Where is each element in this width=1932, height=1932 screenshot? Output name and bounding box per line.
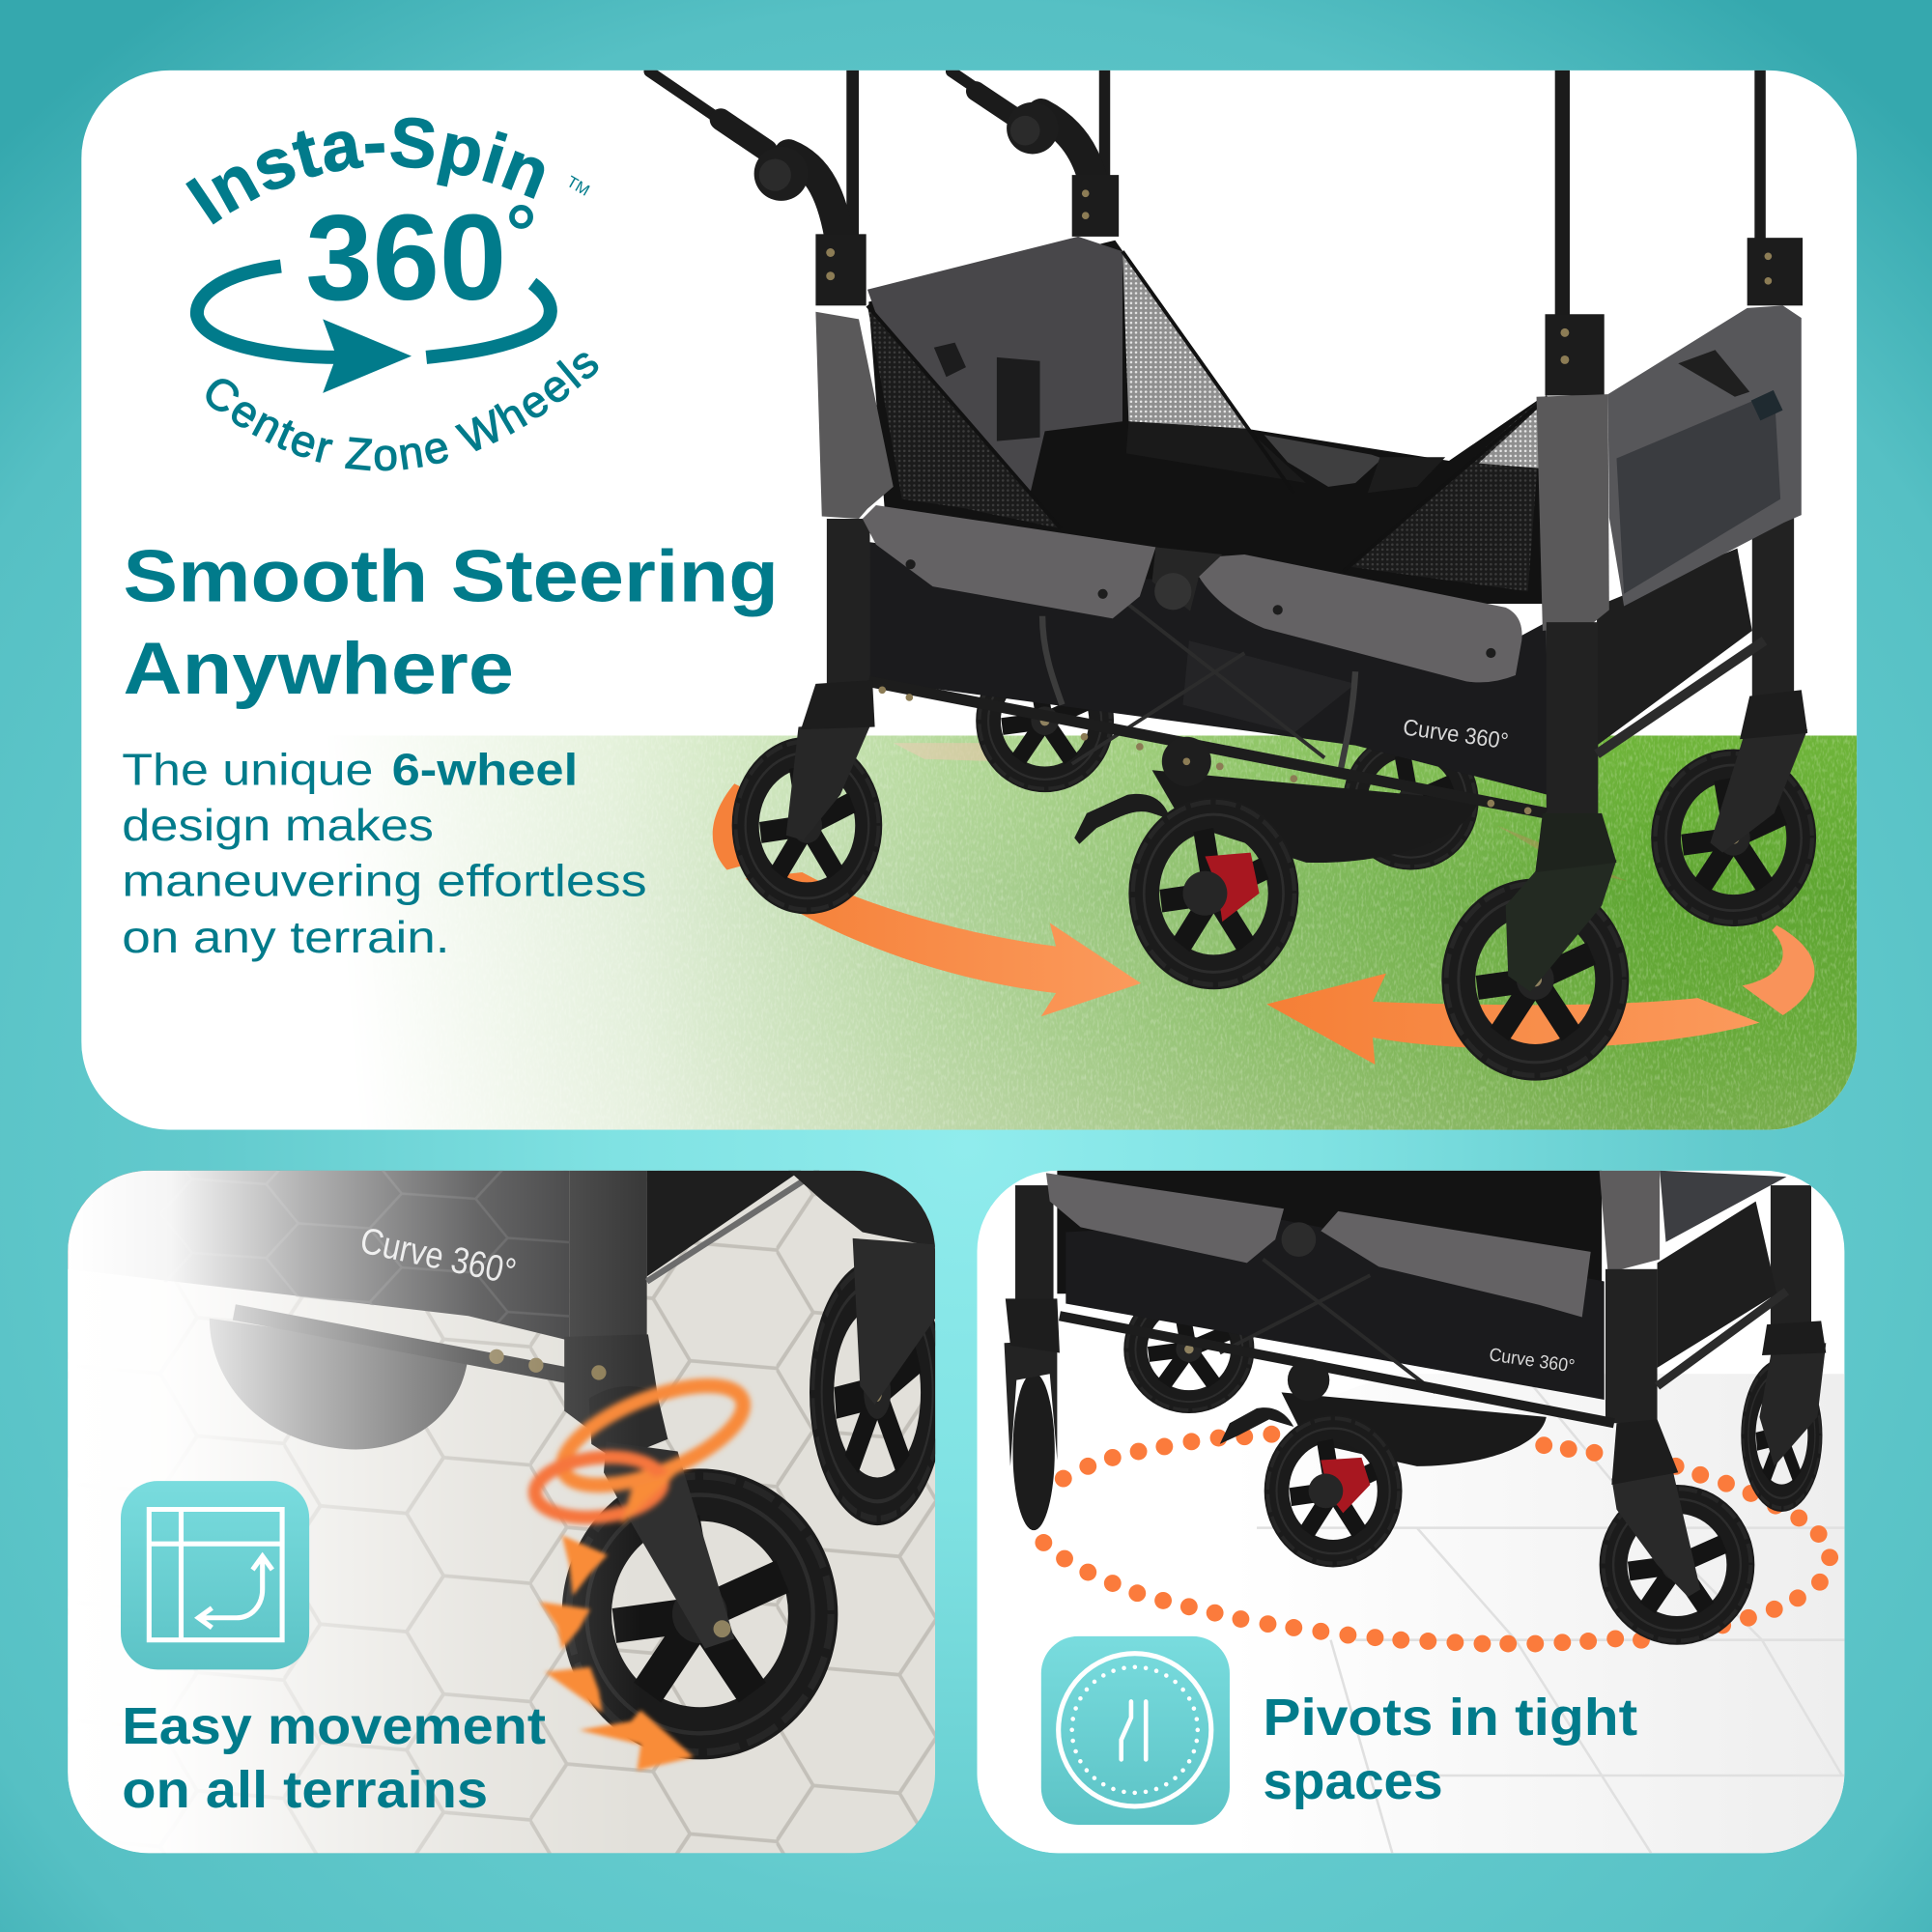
trademark: TM — [563, 172, 593, 200]
panel background — [81, 71, 1857, 1130]
canopy rods — [846, 71, 1766, 317]
side bar — [1658, 1292, 1786, 1386]
body text: The unique — [122, 744, 373, 794]
caption: easy movement: Easy movement — [122, 1698, 546, 1755]
panel background — [977, 1171, 1844, 1853]
rotation arrow: right arc — [426, 283, 551, 357]
swivel: back right — [1740, 690, 1807, 739]
rod sockets — [815, 175, 1803, 395]
road lines — [1122, 1701, 1146, 1759]
front right wheel — [1600, 1485, 1754, 1645]
rear right post — [1771, 1185, 1811, 1331]
lower bar — [1060, 1316, 1614, 1423]
centre knob — [1154, 573, 1191, 610]
side frame bar — [1597, 640, 1765, 754]
back mesh lower — [1126, 421, 1306, 483]
hidden centre rear wheel — [1345, 748, 1478, 869]
interior top — [1057, 1171, 1602, 1293]
handle joints — [754, 102, 1059, 201]
joint close-up — [564, 1334, 659, 1430]
side panel — [1660, 1171, 1786, 1242]
icon: narrow road — [1041, 1636, 1230, 1825]
bolts close-up — [489, 1350, 607, 1380]
far right fork — [1759, 1343, 1826, 1466]
lower frame bar — [868, 681, 1547, 813]
lower bar close-up — [234, 1312, 579, 1378]
white fade overlay — [68, 1171, 935, 1853]
centre wheel — [1264, 1414, 1403, 1567]
fabric hex texture — [160, 1171, 569, 1341]
armrest snaps — [906, 559, 1495, 658]
curve 360 label: Curve 360° — [1488, 1345, 1576, 1378]
swivel: front left — [801, 680, 875, 729]
rotation arrow: head — [323, 319, 412, 393]
rotation arrow: left arc — [197, 267, 339, 357]
basket — [1065, 1220, 1605, 1400]
turn arrow — [198, 1556, 272, 1628]
outer ring — [1059, 1654, 1211, 1806]
left armrest — [1046, 1173, 1284, 1263]
under-basket close-up — [210, 1319, 469, 1449]
orange arrow: left crescent — [713, 783, 740, 869]
front right sleeve — [1537, 394, 1609, 631]
front right armrest — [1199, 554, 1522, 682]
grass field — [391, 735, 1857, 1130]
fork: front right — [1506, 860, 1616, 992]
rear wheel — [1123, 1285, 1254, 1413]
side pocket — [1616, 392, 1780, 594]
orange arrow: right crescent — [1743, 925, 1814, 1015]
tile floor — [977, 1374, 1844, 1853]
centre disc — [1162, 737, 1211, 786]
centre knob — [1282, 1222, 1316, 1257]
rear fork close-up — [853, 1238, 935, 1405]
body text: 6-wheel — [392, 744, 578, 794]
frame top right close-up — [788, 1171, 935, 1247]
under-basket — [1152, 770, 1479, 863]
basket fold — [1182, 640, 1355, 733]
swivel: front right — [1535, 813, 1616, 872]
left thin wheel — [1012, 1373, 1055, 1530]
fork: front left — [786, 721, 872, 840]
degree symbol — [512, 208, 530, 226]
left post — [1015, 1185, 1054, 1302]
body text: design makes — [122, 800, 434, 850]
dark side close-up — [647, 1171, 801, 1276]
right basket — [1597, 549, 1752, 746]
caption: easy movement — [122, 1698, 546, 1819]
dark rear cushion — [1368, 457, 1445, 493]
right sleeve — [1600, 1171, 1660, 1273]
fabric basket close-up — [68, 1171, 569, 1341]
carry handle — [1678, 350, 1749, 397]
panel: easy movement — [68, 1171, 945, 1853]
rear wheel close-up — [810, 1260, 945, 1525]
body text — [122, 744, 647, 962]
handles — [649, 71, 1094, 244]
wagon: lower section — [1005, 1171, 1826, 1645]
right side panel — [1608, 305, 1802, 607]
fork: back right — [1710, 729, 1807, 853]
front basket — [870, 542, 1548, 795]
swivel close-up — [589, 1386, 668, 1460]
right post — [1605, 1269, 1658, 1423]
post close-up — [569, 1171, 647, 1341]
dotted orange path — [1035, 1426, 1838, 1652]
front left armrest — [863, 505, 1155, 618]
360 numeral: 360 — [305, 189, 506, 326]
fork close-up — [604, 1441, 734, 1649]
red brake hub — [1321, 1458, 1370, 1513]
wagon: full view — [649, 71, 1816, 1081]
front wheel close-up — [562, 1468, 838, 1759]
logo arc: insta-spin — [210, 166, 562, 227]
caption: pivots in tight spaces: spaces — [1263, 1753, 1443, 1810]
wheel: front right — [1441, 878, 1629, 1081]
under basket — [1282, 1392, 1547, 1466]
centre bracket — [1152, 547, 1222, 611]
heading: smooth steering anywhere — [124, 535, 779, 710]
side bar close-up — [647, 1171, 819, 1282]
socket bolts — [826, 189, 1772, 364]
insta-spin text: Insta-Spin — [185, 118, 545, 224]
caption: easy movement: on all terrains — [122, 1762, 488, 1819]
wagon interior — [868, 241, 1543, 604]
wheel: front left — [732, 737, 882, 914]
dotted inner ring — [1072, 1667, 1198, 1793]
seat straps — [934, 343, 1040, 441]
wagon close-up — [68, 1171, 945, 1759]
center zone wheels text: Center Zone Wheels — [206, 353, 599, 471]
icon: floor plan turn — [121, 1481, 309, 1669]
left post sleeve — [815, 312, 894, 519]
orange arrow: sweeping right — [746, 872, 1141, 1016]
paving stones — [68, 1171, 935, 1853]
rear right post — [1752, 518, 1794, 733]
right mesh panel — [1350, 397, 1543, 591]
x brace — [1220, 1260, 1435, 1392]
curve 360 label close-up: Curve 360° — [356, 1220, 520, 1293]
floor plan outline — [149, 1509, 282, 1640]
left fork — [1005, 1341, 1057, 1466]
caption: pivots in tight spaces: Pivots in tight — [1263, 1690, 1637, 1747]
basket straps — [1042, 616, 1355, 770]
frame bolts — [878, 686, 1531, 814]
orange flame arrows — [540, 1535, 694, 1771]
centre disc — [1288, 1359, 1329, 1401]
x brace — [1072, 604, 1324, 764]
wheel: back right — [1651, 750, 1816, 926]
caption: pivots in tight spaces — [1263, 1690, 1637, 1810]
heading: smooth steering anywhere: Anywhere — [124, 628, 514, 710]
body text: maneuvering effortless — [122, 855, 647, 905]
front right post — [1547, 622, 1598, 844]
left swivel — [1006, 1298, 1060, 1353]
rear bench — [1264, 435, 1382, 487]
rear wheel behind basket — [976, 696, 1115, 792]
logo arc: center zone wheels — [200, 367, 601, 470]
wheel: centre — [1128, 797, 1298, 989]
logo: insta-spin 360 — [185, 118, 599, 471]
left mesh panel — [867, 305, 1061, 528]
front right fork — [1611, 1472, 1700, 1597]
footbrake — [1074, 794, 1171, 844]
front right swivel — [1611, 1419, 1678, 1485]
far right wheel — [1741, 1359, 1822, 1512]
orange arrow: sweeping left — [1266, 974, 1759, 1065]
panel: pivots — [977, 1171, 1844, 1853]
far right swivel — [1762, 1321, 1826, 1355]
right armrest — [1321, 1211, 1591, 1318]
body text: on any terrain. — [122, 912, 450, 962]
seat back — [867, 237, 1122, 499]
panel: smooth steering — [81, 71, 1857, 1130]
orange spin rings — [532, 1365, 756, 1523]
heading: smooth steering anywhere: Smooth Steering — [124, 535, 779, 617]
back mesh panel — [1122, 251, 1247, 429]
brand tag — [1751, 390, 1782, 420]
red brake hub — [1205, 853, 1260, 922]
right basket — [1658, 1202, 1776, 1368]
front left post — [827, 519, 870, 689]
axle bolt close-up — [714, 1620, 730, 1637]
curve 360 label: Curve 360° — [1402, 714, 1510, 753]
footbrake — [1220, 1407, 1293, 1444]
